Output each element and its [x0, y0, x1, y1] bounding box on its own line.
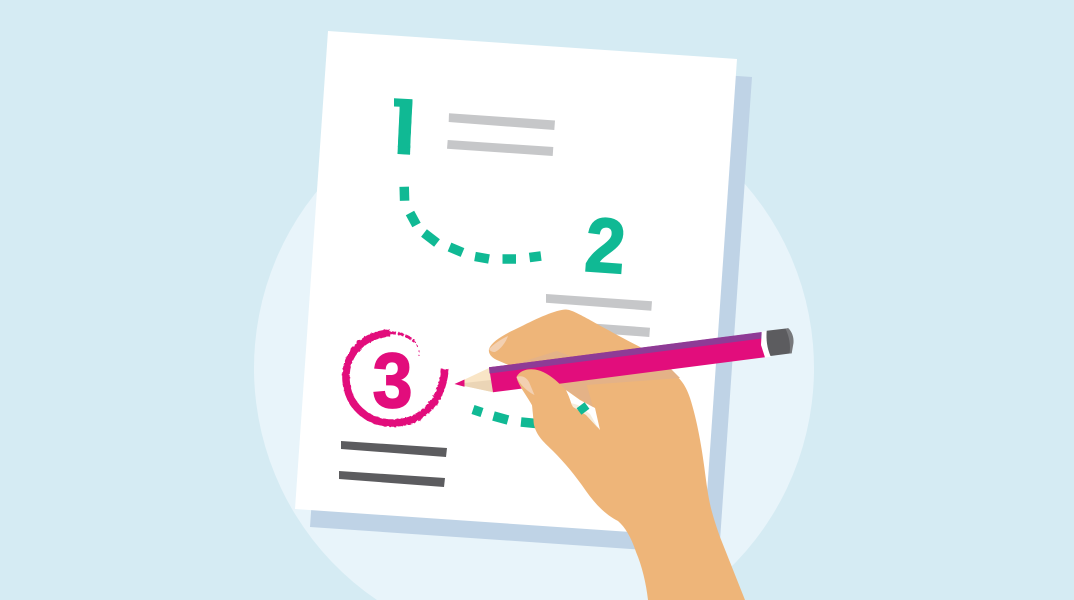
gap between thumb and palm	[566, 390, 600, 430]
pencil purple stripe	[489, 332, 762, 374]
illustration: numbered checklist with hand and pencil	[254, 31, 814, 600]
eraser highlight	[786, 328, 794, 354]
thumbnail	[516, 376, 534, 395]
last green dash	[579, 406, 587, 412]
pencil	[454, 328, 794, 392]
background circle	[254, 88, 814, 600]
cream edge in gap	[571, 403, 598, 428]
hand shape	[489, 310, 745, 600]
paper shadow	[310, 49, 752, 555]
pencil wood tip	[455, 368, 493, 392]
step 1: number and text lines	[394, 98, 555, 156]
shade above pencil	[512, 351, 573, 365]
shade below pencil	[560, 368, 680, 407]
pencil white band	[761, 331, 771, 358]
step 3: circled number and text lines	[339, 333, 447, 487]
pencil wood shade	[455, 380, 493, 392]
index fingernail	[489, 336, 508, 352]
text lines for step 2	[544, 294, 652, 337]
hand-drawn circle	[346, 333, 445, 423]
flag of number 1	[394, 98, 412, 110]
paper sheet	[295, 31, 737, 537]
number 2: 2	[582, 201, 628, 290]
number 3: 3	[373, 338, 412, 424]
hand	[489, 310, 745, 600]
text lines for step 1	[447, 113, 555, 156]
step 2: number and text lines	[544, 201, 652, 337]
thumb shape	[516, 369, 572, 440]
pencil lead	[454, 380, 464, 387]
dashed path from 1 to 2	[404, 187, 541, 259]
text lines for step 3	[339, 441, 447, 487]
number 1: 1	[378, 81, 427, 172]
pencil body	[489, 332, 765, 392]
pencil eraser	[766, 328, 792, 356]
dashed path toward 3	[473, 410, 536, 424]
thumb over pencil	[516, 369, 572, 440]
